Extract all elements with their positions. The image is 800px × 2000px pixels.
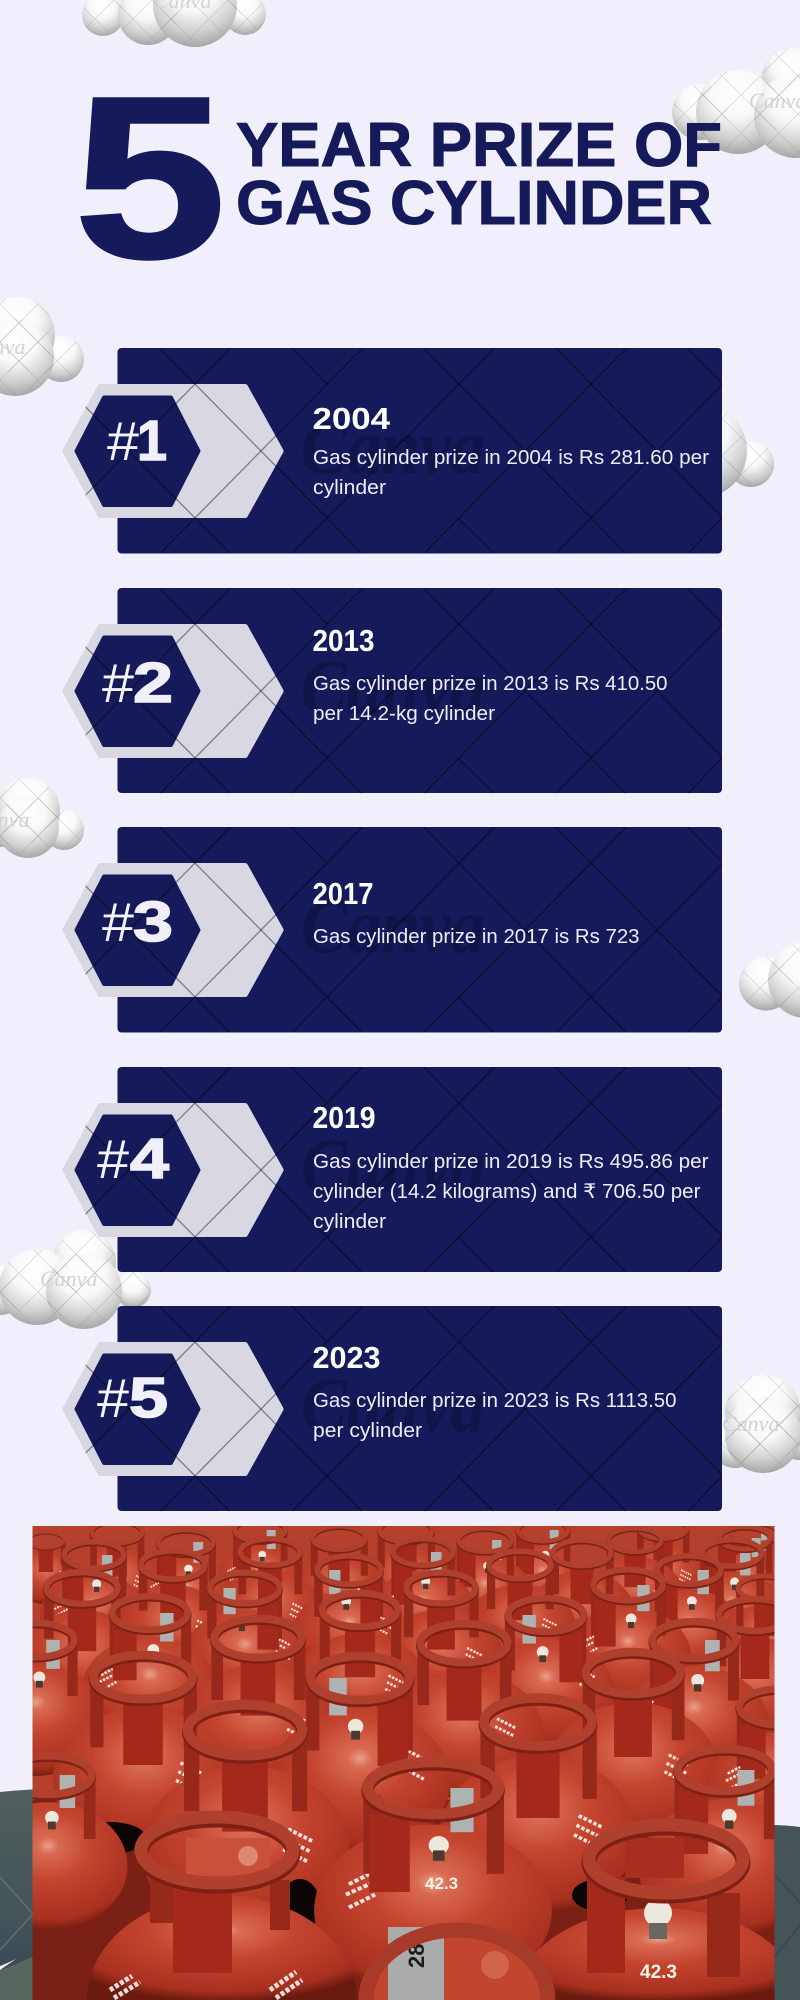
card 4 text: cylinder xyxy=(313,1211,386,1233)
card 5 hexagon badge xyxy=(66,1345,280,1473)
cloud: left between cards 4 and 5: Canva xyxy=(40,1266,97,1291)
card 4 year: 2019 xyxy=(312,1100,376,1135)
card 2 year: 2013 xyxy=(312,623,374,658)
card 5 panel xyxy=(118,1306,722,1511)
card 1 year: 2004 xyxy=(312,401,391,436)
card 2: 2013 xyxy=(28,588,758,793)
card 5 number xyxy=(97,1366,168,1430)
front cylinder centre: 28 xyxy=(404,1944,429,1968)
card 4 text: Gas cylinder prize in 2019 is Rs 495.86 per xyxy=(313,1151,709,1173)
card 2 number xyxy=(102,651,173,715)
card 5 year: 2023 xyxy=(312,1340,380,1375)
photo: rows of red gas cylinders xyxy=(0,1517,800,2000)
card 2 text: Gas cylinder prize in 2013 is Rs 410.50 xyxy=(313,673,668,695)
card 2 text xyxy=(313,673,668,725)
front cylinder right: 42.3 xyxy=(640,1962,677,1983)
card 4 hexagon badge xyxy=(66,1106,280,1234)
card 1 number: # xyxy=(107,410,139,472)
title: line 1: YEAR PRIZE OF xyxy=(236,111,722,180)
cloud: left of card 1 xyxy=(0,297,84,396)
card 2 watermark: Canva xyxy=(301,643,485,730)
card 5 text: per cylinder xyxy=(313,1420,422,1442)
cloud: right of card 1 xyxy=(653,404,774,498)
cloud: left between cards 4 and 5 xyxy=(0,1230,151,1329)
card 3: 2017 xyxy=(28,827,758,1032)
card 4 text: cylinder (14.2 kilograms) and ₹ 706.50 per xyxy=(313,1181,701,1203)
cylinder weight label: 42.3 xyxy=(425,1874,458,1893)
card 3 panel xyxy=(118,827,722,1032)
cloud: right of card 5 xyxy=(710,1375,800,1473)
dark shape: bottom right xyxy=(770,1825,800,2000)
card 1 panel xyxy=(118,348,722,554)
card 2 number: # xyxy=(102,652,134,714)
card 3 hexagon badge xyxy=(66,866,280,994)
card 1 number xyxy=(107,409,167,473)
cloud: top centre xyxy=(82,0,266,47)
card 5: 2023 xyxy=(28,1306,758,1511)
card 3 number xyxy=(102,890,173,954)
title: big number 5: 5 xyxy=(74,49,226,306)
card 2 text: per 14.2-kg cylinder xyxy=(313,703,495,725)
card 2 hexagon badge xyxy=(66,627,280,755)
card 4 panel xyxy=(118,1067,722,1272)
card 3 year: 2017 xyxy=(312,876,374,911)
card 5 text: Gas cylinder prize in 2023 is Rs 1113.50 xyxy=(313,1390,676,1412)
card 1 watermark: Canva xyxy=(301,403,485,490)
front cylinder centre xyxy=(366,1927,548,2000)
card 4 number: # xyxy=(97,1128,129,1190)
card 3 watermark: Canva xyxy=(301,882,485,969)
title: line 2: GAS CYLINDER xyxy=(236,169,712,238)
card 4 number xyxy=(97,1127,169,1191)
card 3 text: Gas cylinder prize in 2017 is Rs 723 xyxy=(313,926,640,948)
card 3 number: 3 xyxy=(133,890,173,954)
front cylinder right xyxy=(536,1818,774,2000)
card 4 text xyxy=(313,1151,709,1233)
card 1 hexagon badge xyxy=(66,387,280,515)
card 1: 2004 xyxy=(28,348,758,554)
card 4: 2019 xyxy=(28,1067,758,1272)
card 5 watermark: Canva xyxy=(301,1361,485,1448)
card 1 number: 1 xyxy=(137,409,167,473)
card 4 watermark: Canva xyxy=(301,1122,485,1209)
title xyxy=(74,49,722,306)
card 4 number: 4 xyxy=(130,1127,169,1191)
card 1 text: cylinder xyxy=(313,477,386,499)
card 5 number: # xyxy=(97,1367,129,1429)
card 2 panel xyxy=(118,588,722,793)
card 5 text xyxy=(313,1390,676,1442)
card 1 text xyxy=(313,447,709,499)
card 3 number: # xyxy=(102,891,134,953)
cloud: right of card 5: Canva xyxy=(722,1411,779,1436)
card 2 number: 2 xyxy=(133,651,173,715)
dark shape: bottom left xyxy=(0,1789,40,2000)
front cylinder left xyxy=(87,1817,357,2000)
cloud: top right xyxy=(672,48,800,158)
cloud: right of card 3 xyxy=(739,942,800,1018)
card 1 text: Gas cylinder prize in 2004 is Rs 281.60 per xyxy=(313,447,709,469)
cloud: left of card 3 xyxy=(0,778,84,858)
card 5 number: 5 xyxy=(129,1366,168,1430)
